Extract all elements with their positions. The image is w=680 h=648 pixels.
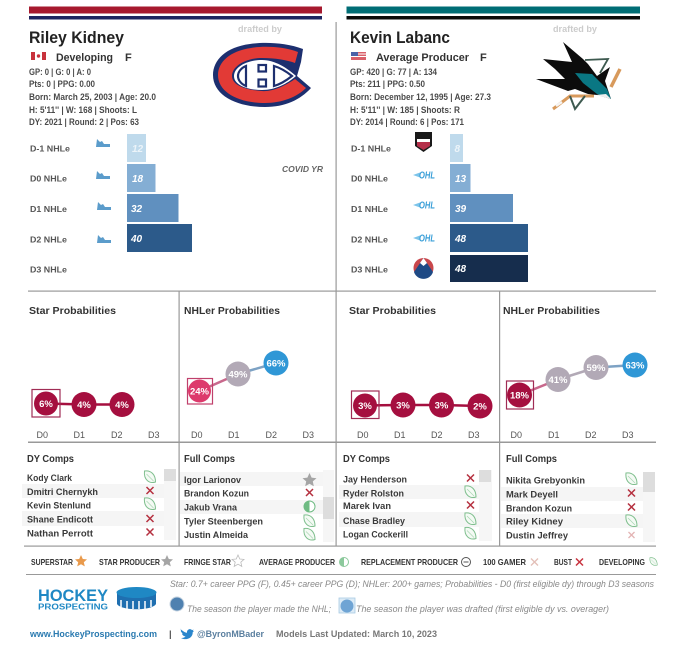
player stats xyxy=(350,67,491,128)
axis labels xyxy=(357,430,480,440)
comp table: Dustin Jeffrey xyxy=(506,530,569,542)
legend: STAR PRODUCER xyxy=(99,557,160,567)
row labels: D3 NHLe xyxy=(351,264,388,274)
line chart: 66% xyxy=(266,358,286,370)
legend: DEVELOPING xyxy=(599,557,645,567)
axis labels: D1 xyxy=(548,430,560,440)
axis labels: D0 xyxy=(357,430,369,440)
icon: Canada flag xyxy=(31,52,46,60)
bar chart: 32 xyxy=(131,204,143,215)
drafted by label: drafted by xyxy=(238,24,282,34)
comp table: Shane Endicott xyxy=(27,514,94,526)
row labels: D2 NHLe xyxy=(351,234,388,244)
comp table: Nathan Perrott xyxy=(27,528,94,540)
line chart: 3% xyxy=(358,401,372,412)
line chart: 4% xyxy=(77,400,91,411)
row labels: D2 NHLe xyxy=(30,234,67,244)
line chart: 59% xyxy=(586,363,606,374)
line chart xyxy=(506,352,648,409)
heading: NHLer Probabilities xyxy=(184,305,280,317)
heading: DY Comps xyxy=(27,453,74,465)
comp table: Brandon Kozun xyxy=(506,504,572,514)
bar chart: 18 xyxy=(132,174,144,185)
comp table: Mark Deyell xyxy=(506,490,558,500)
line chart xyxy=(352,391,492,418)
comp table xyxy=(22,469,176,540)
bar chart: 13 xyxy=(455,174,467,185)
line chart xyxy=(32,390,134,417)
comp table xyxy=(339,470,492,541)
heading: Full Comps xyxy=(184,453,235,465)
legend: REPLACEMENT PRODUCER xyxy=(361,557,458,567)
panel: Labanc NHLer probabilities xyxy=(503,305,648,440)
legend: FRINGE STAR xyxy=(184,557,231,567)
comp table: Jakub Vrana xyxy=(184,502,238,514)
axis labels: D0 xyxy=(191,430,203,440)
comp table: Riley Kidney xyxy=(506,516,564,528)
legend: 100 GAMER xyxy=(483,557,526,567)
comp table: Logan Cockerill xyxy=(343,530,408,540)
row labels: D-1 NHLe xyxy=(30,144,70,154)
Hockey Prospecting logo: PROSPECTING xyxy=(38,602,108,612)
panel: Kevin Labanc header xyxy=(346,6,640,128)
icon: twitter bird xyxy=(180,628,194,639)
heading: Star Probabilities xyxy=(29,305,116,317)
footer links: | xyxy=(169,629,172,640)
line chart: 2% xyxy=(473,402,487,412)
axis labels: D2 xyxy=(111,430,123,440)
legend: AVERAGE PRODUCER xyxy=(259,557,335,567)
bar chart: 48 xyxy=(454,264,467,275)
explanatory notes xyxy=(170,579,654,614)
drafted by label: drafted by xyxy=(553,24,597,34)
player stats: Pts: 0 | PPG: 0.00 xyxy=(29,79,95,90)
panel: Labanc star probabilities xyxy=(349,305,492,440)
axis labels: D3 xyxy=(468,430,480,440)
heading: DY Comps xyxy=(343,453,390,465)
row labels: D-1 NHLe xyxy=(351,144,391,154)
line chart xyxy=(188,350,288,404)
panel: Kidney NHLer probabilities xyxy=(184,305,314,440)
player tier and position: Average Producer xyxy=(376,52,470,64)
panel: Labanc full comps xyxy=(501,453,655,542)
dividers xyxy=(24,22,656,575)
comp table: Kevin Stenlund xyxy=(27,500,91,512)
Hockey Prospecting logo xyxy=(38,586,156,612)
axis labels xyxy=(510,430,634,440)
axis labels: D1 xyxy=(228,430,240,440)
footer links: www.HockeyProspecting.com xyxy=(29,629,157,640)
player stats: DY: 2014 | Round: 6 | Pos: 171 xyxy=(350,117,465,128)
axis labels: D3 xyxy=(148,430,160,440)
comp table: Dmitri Chernykh xyxy=(27,487,98,498)
line chart: 18% xyxy=(510,390,530,402)
axis labels: D0 xyxy=(36,430,48,440)
player name: Riley Kidney xyxy=(29,28,124,47)
player stats: GP: 0 | G: 0 | A: 0 xyxy=(29,67,91,78)
player stats: GP: 420 | G: 77 | A: 134 xyxy=(350,67,438,78)
comp table: Ryder Rolston xyxy=(343,488,404,500)
bar chart: 39 xyxy=(455,204,467,215)
footer links: Models Last Updated: March 10, 2023 xyxy=(276,629,437,640)
player name: Kevin Labanc xyxy=(350,28,450,47)
panel: Kidney DY comps xyxy=(22,453,176,540)
panel: Kidney NHLe bars xyxy=(30,134,324,274)
line chart: 3% xyxy=(396,400,410,412)
player stats: H: 5'11'' | W: 168 | Shoots: L xyxy=(29,105,137,116)
bar chart: 12 xyxy=(132,144,144,155)
player tier and position: Developing xyxy=(56,52,113,64)
panel: Labanc DY comps xyxy=(339,453,492,541)
comp table: Marek Ivan xyxy=(343,501,391,512)
footer links xyxy=(29,628,437,640)
comp table: Tyler Steenbergen xyxy=(184,516,263,528)
comp table: Brandon Kozun xyxy=(184,488,249,500)
legend: SUPERSTAR xyxy=(31,557,73,567)
bar chart: 8 xyxy=(454,144,460,155)
team colour bars: San Jose xyxy=(346,6,640,20)
row labels: D1 NHLe xyxy=(30,204,67,214)
player stats: Born: December 12, 1995 | Age: 27.3 xyxy=(350,92,491,103)
icon: USA flag xyxy=(351,52,366,60)
axis labels: D3 xyxy=(302,430,314,440)
footer links: @ByronMBader xyxy=(197,629,264,640)
Hockey Prospecting logo: HOCKEY xyxy=(38,586,109,605)
icons: OHL logos xyxy=(413,170,435,244)
heading: Full Comps xyxy=(506,453,557,465)
row labels xyxy=(30,144,70,274)
heading: NHLer Probabilities xyxy=(503,305,600,317)
axis labels: D2 xyxy=(266,430,277,440)
player stats: Born: March 25, 2003 | Age: 20.0 xyxy=(29,92,156,103)
row labels: D3 NHLe xyxy=(30,264,67,274)
row labels xyxy=(351,144,391,274)
axis labels: D2 xyxy=(431,430,443,440)
axis labels: D0 xyxy=(510,430,522,440)
icon: Canadiens logo xyxy=(213,43,311,107)
panel: Labanc NHLe bars xyxy=(351,132,528,282)
panel: Riley Kidney header xyxy=(29,6,322,128)
panel: Kidney full comps xyxy=(180,453,334,542)
comp table: Justin Almeida xyxy=(184,530,249,541)
axis labels xyxy=(191,430,314,440)
player tier and position: F xyxy=(480,52,487,64)
line chart: 63% xyxy=(625,360,645,372)
bar chart xyxy=(450,134,528,282)
axis labels xyxy=(36,430,160,440)
icon: USHL shield xyxy=(415,132,432,152)
legend: BUST xyxy=(554,557,573,567)
player tier and position: F xyxy=(125,52,132,64)
comp table: Nikita Grebyonkin xyxy=(506,476,585,486)
explanatory notes: The season the player made the NHL; xyxy=(187,604,331,614)
comp table: Jay Henderson xyxy=(343,474,407,486)
player stats: DY: 2021 | Round: 2 | Pos: 63 xyxy=(29,117,139,128)
line chart: 6% xyxy=(39,399,53,410)
covid note: COVID YR xyxy=(282,164,324,174)
player stats: H: 5'11'' | W: 185 | Shoots: R xyxy=(350,105,460,116)
comp table xyxy=(180,470,334,542)
explanatory notes: Star: 0.7+ career PPG (F), 0.45+ career PPG (D); NHLer: 200+ games; Probabilities - D0 (first eligible dy) through D3 seasons xyxy=(170,579,654,589)
bar chart xyxy=(127,134,192,252)
bar chart: 40 xyxy=(130,234,143,245)
line chart: 4% xyxy=(115,400,129,411)
bar chart: 48 xyxy=(454,234,467,245)
player stats xyxy=(29,67,156,128)
legend xyxy=(31,555,657,567)
axis labels: D3 xyxy=(622,430,634,440)
comp table xyxy=(501,472,655,542)
comp table: Kody Clark xyxy=(27,473,73,484)
row labels: D1 NHLe xyxy=(351,204,388,214)
icons: league logos xyxy=(96,139,111,243)
player stats: Pts: 211 | PPG: 0.50 xyxy=(350,79,425,90)
line chart: 3% xyxy=(435,400,449,412)
panel: Kidney star probabilities xyxy=(29,305,160,440)
line chart: 41% xyxy=(548,375,568,386)
row labels: D0 NHLe xyxy=(351,174,388,184)
axis labels: D1 xyxy=(394,430,406,440)
row labels: D0 NHLe xyxy=(30,174,67,184)
icon: Sharks logo xyxy=(536,42,620,109)
team colour bars: Montreal xyxy=(29,6,322,20)
icon: AHL logo xyxy=(414,258,434,279)
comp table: Chase Bradley xyxy=(343,516,406,527)
heading: Star Probabilities xyxy=(349,305,436,317)
axis labels: D2 xyxy=(585,430,597,440)
line chart: 49% xyxy=(228,370,248,380)
line chart: 24% xyxy=(190,386,210,398)
comp table: Igor Larionov xyxy=(184,475,242,486)
axis labels: D1 xyxy=(74,430,85,440)
explanatory notes: The season the player was drafted (first eligible dy vs. overager) xyxy=(356,604,609,614)
